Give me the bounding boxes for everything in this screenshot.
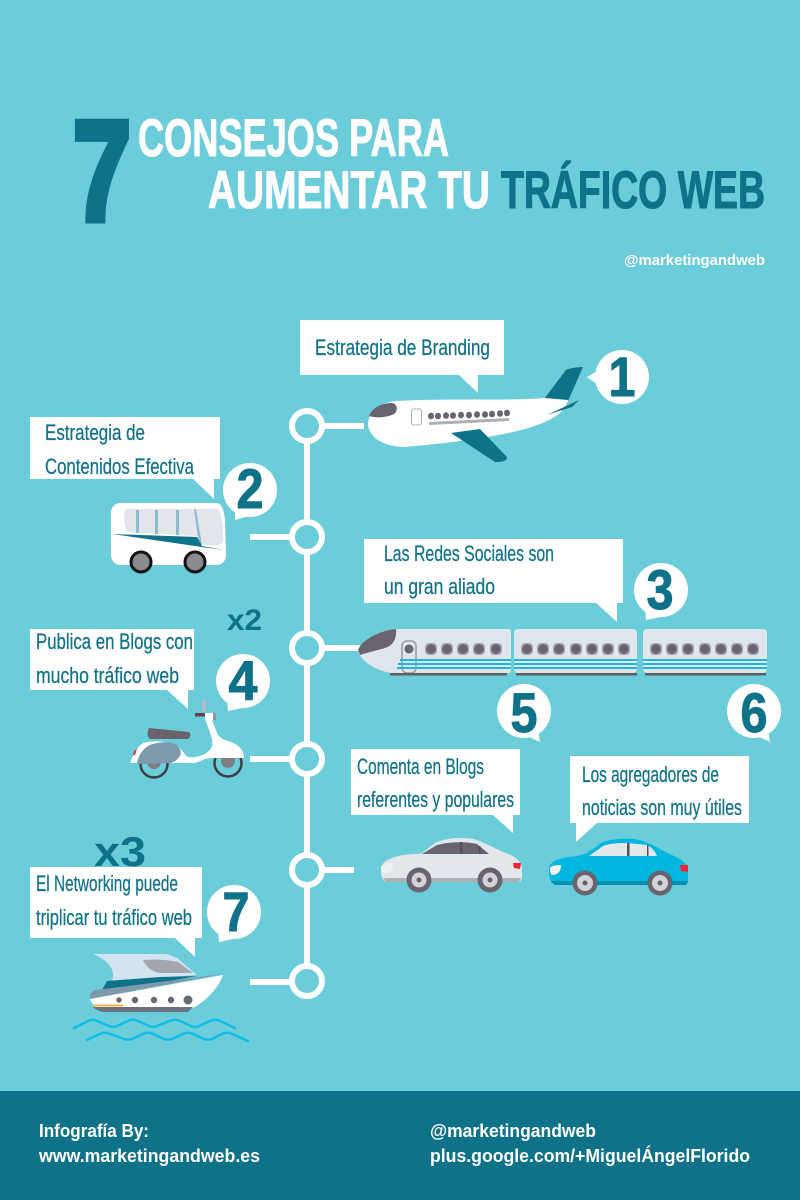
number badge 2 xyxy=(223,457,277,520)
footer: www.marketingandweb.es xyxy=(38,1146,260,1166)
number badge 7: 7 xyxy=(222,880,250,943)
tip 3: Las Redes Sociales xyxy=(364,539,623,622)
tip 7: El Networking xyxy=(30,867,202,957)
footer: @marketingandweb xyxy=(430,1121,596,1141)
tip 1: Estrategia de Branding xyxy=(300,320,504,393)
footer xyxy=(0,1091,800,1200)
tip 5: Comenta en Blogs: Comenta en Blogs xyxy=(357,754,484,779)
icon: scooter xyxy=(130,700,244,778)
tip 5: Comenta en Blogs: referentes y populares xyxy=(357,787,514,812)
tip 4: Publica en Blogs xyxy=(30,629,194,709)
icon: airplane xyxy=(368,367,583,462)
title xyxy=(73,92,765,251)
icon: train xyxy=(358,629,767,676)
annotation x2: x2 xyxy=(227,604,262,637)
annotation x3: x3 xyxy=(94,828,146,875)
tip 2: Estrategia de Contenidos Efectiva: Estrategia de xyxy=(45,420,145,445)
number badge 1: 1 xyxy=(608,345,636,408)
tip 7: El Networking: El Networking puede xyxy=(36,871,178,896)
tip 7: El Networking: triplicar tu tráfico web xyxy=(36,905,192,930)
tip 3: Las Redes Sociales: Las Redes Sociales son xyxy=(384,541,554,566)
number badge 4: 4 xyxy=(228,649,258,712)
tip 2: Estrategia de Contenidos Efectiva: Contenidos Efectiva xyxy=(45,454,195,479)
number badge 5 xyxy=(497,681,551,744)
icon: yacht xyxy=(90,954,223,1012)
number badge 4 xyxy=(216,649,270,712)
number badge 3: 3 xyxy=(646,558,674,621)
tip 6: Los agregadores: Los agregadores de xyxy=(582,762,719,787)
tip 4: Publica en Blogs: Publica en Blogs con xyxy=(36,629,193,654)
number badge 7 xyxy=(207,880,261,943)
title: AUMENTAR TU xyxy=(208,161,490,220)
tip 6: Los agregadores xyxy=(570,756,749,842)
icon: blue car xyxy=(549,839,688,896)
footer: Infografía By: xyxy=(39,1121,149,1141)
tip 4: Publica en Blogs: mucho tráfico web xyxy=(36,663,179,688)
tip 5: Comenta en Blogs xyxy=(351,749,520,833)
number badge 6: 6 xyxy=(740,681,768,744)
title: 7 xyxy=(73,92,131,251)
tip 6: Los agregadores: noticias son muy útiles xyxy=(582,795,742,820)
title: CONSEJOS PARA xyxy=(138,109,449,168)
number badge 3 xyxy=(634,558,688,621)
timeline xyxy=(250,411,364,996)
social handle: @marketingandweb xyxy=(624,252,765,269)
number badge 2: 2 xyxy=(236,457,264,520)
number badge 1 xyxy=(587,345,649,408)
footer: plus.google.com/+MiguelÁngelFlorido xyxy=(430,1145,750,1166)
icon: waves xyxy=(74,1020,248,1041)
tip 3: Las Redes Sociales: un gran aliado xyxy=(384,574,495,599)
number badge 6 xyxy=(727,681,781,744)
tip 1: Estrategia de Branding: Estrategia de Branding xyxy=(315,335,490,360)
tip 2: Estrategia de Contenidos Efectiva xyxy=(30,417,220,499)
icon: bus xyxy=(111,503,226,572)
icon: white car xyxy=(381,838,522,892)
number badge 5: 5 xyxy=(510,681,538,744)
